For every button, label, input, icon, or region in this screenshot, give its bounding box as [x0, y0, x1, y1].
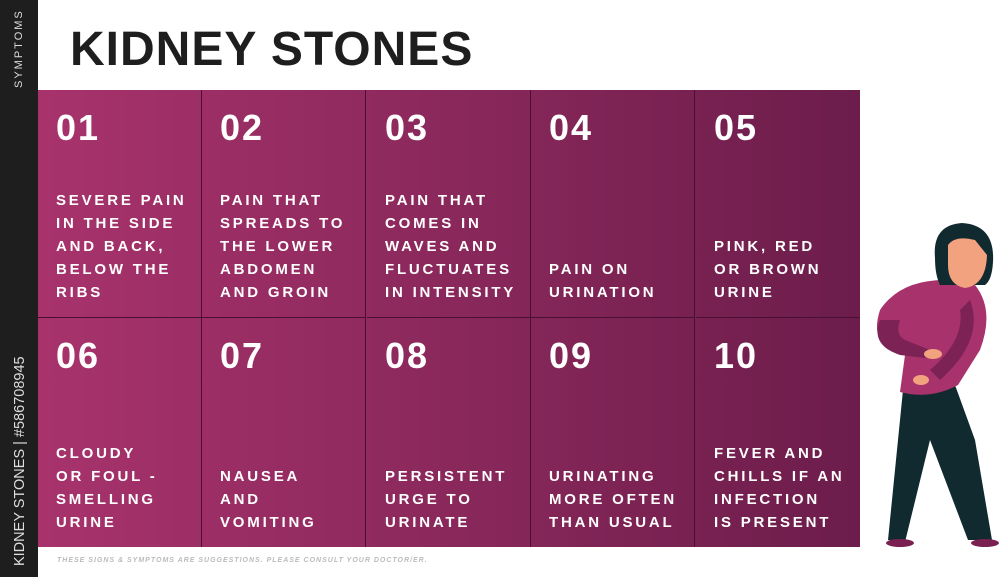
cell 01: SEVERE PAIN: [56, 192, 187, 209]
cell 01: IN THE SIDE: [56, 215, 175, 232]
cell 02: PAIN THAT: [220, 192, 323, 209]
cell 08: PERSISTENT: [385, 468, 507, 485]
cell 01: [38, 90, 202, 318]
cell 06: CLOUDY: [56, 445, 136, 462]
cell 10: 10: [714, 335, 758, 376]
cell 06: 06: [56, 335, 100, 376]
cell 02: [202, 90, 366, 318]
cell 05: OR BROWN: [714, 261, 821, 278]
disclaimer: THESE SIGNS & SYMPTOMS ARE SUGGESTIONS. PLEASE CONSULT YOUR DOCTOR/ER.: [57, 557, 428, 564]
cell 05: [696, 90, 860, 318]
cell 07: AND: [220, 491, 261, 508]
cell 08: URGE TO: [385, 491, 473, 508]
cell 10: INFECTION: [714, 491, 820, 508]
cell 02: ABDOMEN: [220, 261, 317, 278]
cell 07: [202, 318, 366, 547]
cell 02: THE LOWER: [220, 238, 335, 255]
cell 10: FEVER AND: [714, 445, 825, 462]
cell 01: RIBS: [56, 284, 103, 301]
cell 07: NAUSEA: [220, 468, 300, 485]
cell 06: OR FOUL -: [56, 468, 158, 485]
cell 01: AND BACK,: [56, 238, 165, 255]
cell 02: SPREADS TO: [220, 215, 345, 232]
cell 10: CHILLS IF AN: [714, 468, 845, 485]
cell 05: 05: [714, 107, 758, 148]
cell 06: [38, 318, 202, 547]
title: KIDNEY STONES: [70, 23, 473, 76]
cell 04: [531, 90, 695, 318]
cell 10: [714, 335, 845, 531]
cell 08: URINATE: [385, 514, 470, 531]
cell 04: PAIN ON: [549, 261, 630, 278]
cell 02: AND GROIN: [220, 284, 331, 301]
cell 05: PINK, RED: [714, 238, 815, 255]
cell 03: WAVES AND: [385, 238, 499, 255]
sidebar label: symptoms: SYMPTOMS: [13, 9, 25, 88]
cell 03: 03: [385, 107, 429, 148]
cell 02: 02: [220, 107, 264, 148]
cell 03: FLUCTUATES: [385, 261, 512, 278]
cell 04: URINATION: [549, 284, 656, 301]
cell 06: URINE: [56, 514, 117, 531]
cell 09: URINATING: [549, 468, 656, 485]
cell 03: PAIN THAT: [385, 192, 488, 209]
cell 09: 09: [549, 335, 593, 376]
cell 01: 01: [56, 107, 100, 148]
sidebar label: id: KIDNEY STONES | #586708945: [12, 356, 28, 566]
cell 05: URINE: [714, 284, 775, 301]
cell 06: SMELLING: [56, 491, 156, 508]
cell 09: MORE OFTEN: [549, 491, 677, 508]
cell 09: [531, 318, 695, 547]
sidebar: [0, 0, 38, 577]
cell 08: 08: [385, 335, 429, 376]
cell 01: BELOW THE: [56, 261, 171, 278]
cell 04: 04: [549, 107, 593, 148]
cell 03: [367, 90, 531, 318]
cell 08: [367, 318, 531, 547]
cell 07: VOMITING: [220, 514, 317, 531]
cell 09: THAN USUAL: [549, 514, 674, 531]
cell 07: 07: [220, 335, 264, 376]
cell 10: IS PRESENT: [714, 514, 831, 531]
cell 03: IN INTENSITY: [385, 284, 516, 301]
grid of symptoms: [38, 90, 860, 547]
cell 03: COMES IN: [385, 215, 482, 232]
